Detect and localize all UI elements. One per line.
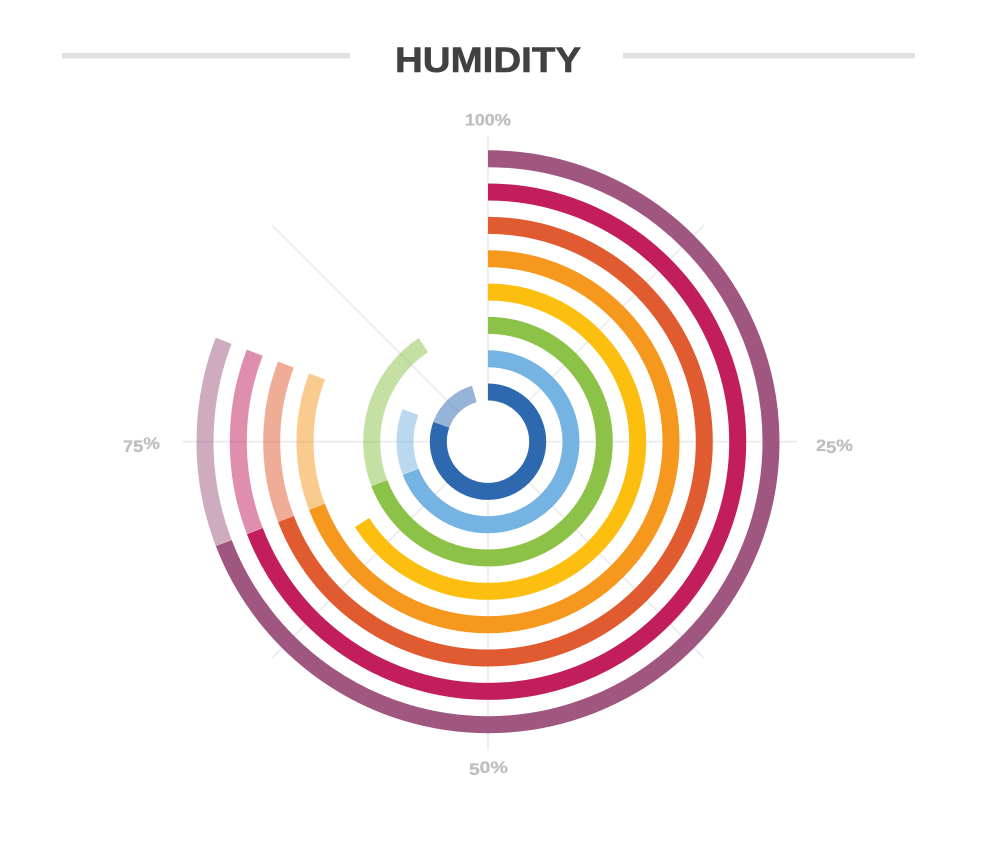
ring 1: purple <box>123 76 853 807</box>
ring 7: light blue <box>381 335 595 549</box>
title rule: right <box>623 53 915 58</box>
ring 6: green <box>338 292 638 592</box>
radial chart: concentric humidity rings <box>123 76 853 807</box>
axis label: 25%: 2 <box>816 437 826 455</box>
ring 8: blue <box>424 378 552 505</box>
ring 3: red-orange <box>209 162 767 721</box>
axis label: 25%: 5 <box>826 439 836 457</box>
axis label: 75%: % <box>143 434 160 453</box>
axis label: 50%: 0 <box>480 759 490 777</box>
axis label: 25%: % <box>836 436 853 455</box>
title: HUMIDITY <box>395 41 581 80</box>
ring 4: orange <box>252 205 724 678</box>
ring 2: crimson <box>166 119 810 764</box>
axis label: 50%: 5 <box>469 761 480 779</box>
axis label: 100%: 100% <box>465 110 511 130</box>
title rule: left <box>62 53 350 58</box>
axis label: 75%: 75 <box>123 438 143 456</box>
ring 5: yellow <box>338 292 638 591</box>
axis label: 50%: % <box>490 758 506 777</box>
